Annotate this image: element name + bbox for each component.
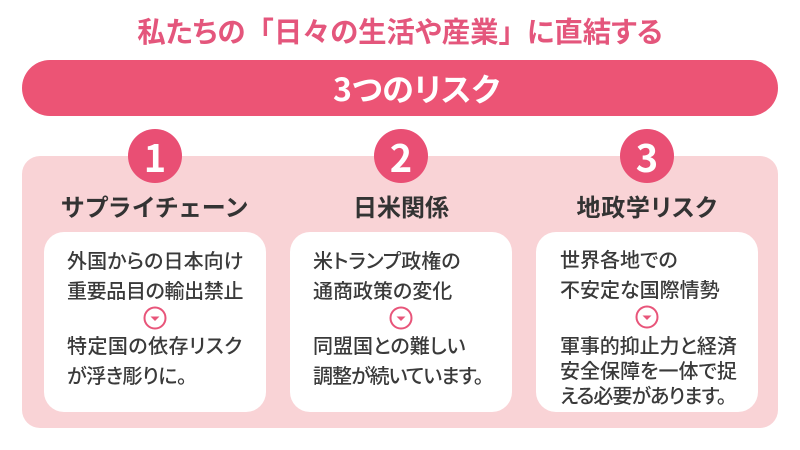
banner: 3 risks: [22, 60, 778, 116]
card 2 text: bottom line 2: 調整が続いています。: [313, 360, 483, 389]
number badge 3: [620, 129, 674, 183]
number badge 1: [128, 129, 182, 183]
card 1: [44, 232, 266, 412]
title: 私たちの「日々の生活や産業」に直結する: [137, 10, 663, 51]
heading: supply chain: サプライチェーン: [61, 188, 249, 223]
number badge 1: 1: [144, 128, 166, 183]
icon: down arrow 2: [390, 306, 412, 330]
icon: down arrow 1: [144, 306, 166, 330]
card 1 text: bottom line 1: 特定国の依存リスク: [67, 330, 243, 359]
card 1 text: top line 1: 外国からの日本向け: [67, 245, 243, 274]
card 3 text: top line 2: 不安定な国際情勢: [560, 274, 720, 303]
icon: down arrow 3: [636, 306, 658, 328]
card 3 text: bottom line 1: 軍事的抑止力と経済: [560, 330, 737, 359]
card 3 text: bottom line 3: える必要があります。: [560, 380, 726, 409]
heading: Japan-US relations: 日米関係: [353, 188, 449, 223]
card 1 text: top line 2: 重要品目の輸出禁止: [67, 275, 243, 304]
card 2: [290, 232, 512, 412]
card 2 text: bottom line 1: 同盟国との難しい: [313, 330, 465, 359]
card 2 text: top line 2: 通商政策の変化: [313, 275, 452, 304]
heading: geopolitical risk: 地政学リスク: [577, 188, 717, 223]
card 3 text: bottom line 2: 安全保障を一体で捉: [560, 355, 737, 384]
card 3 text: top line 1: 世界各地での: [560, 244, 678, 273]
card 3: [536, 232, 758, 412]
number badge 2: [374, 129, 428, 183]
banner: 3 risks: 3つのリスク: [333, 65, 500, 111]
number badge 2: 2: [390, 128, 412, 183]
number badge 3: 3: [636, 128, 658, 183]
panel: background: [22, 156, 778, 428]
card 1 text: bottom line 2: が浮き彫りに。: [67, 360, 186, 389]
card 2 text: top line 1: 米トランプ政権の: [313, 245, 461, 274]
